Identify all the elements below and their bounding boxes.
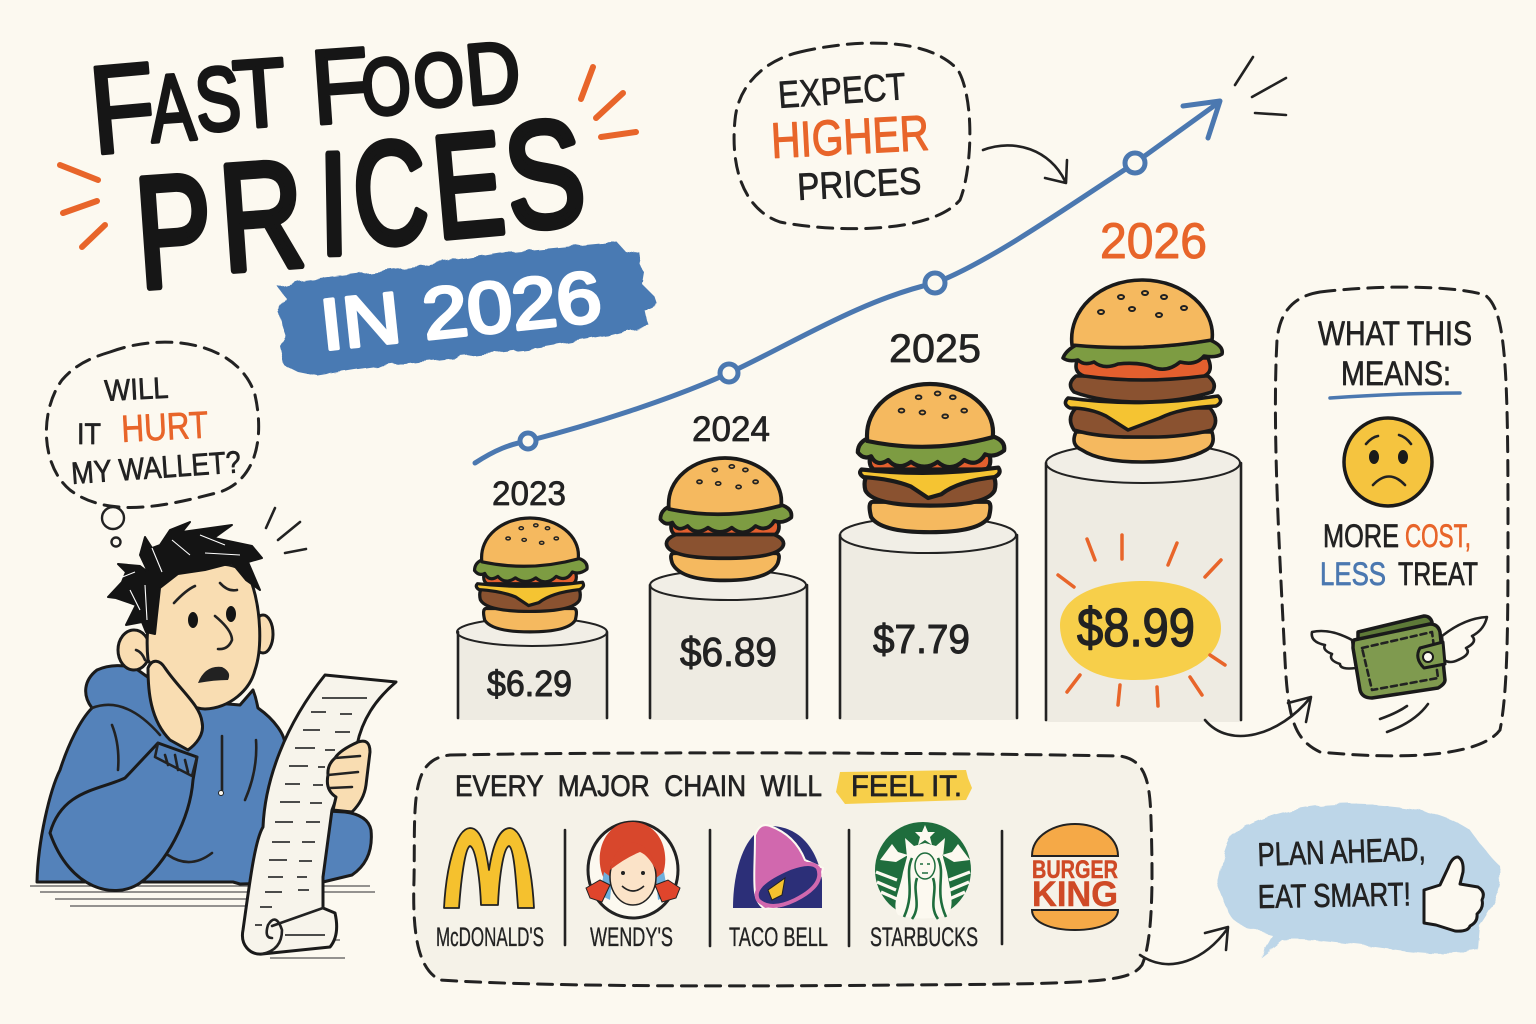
callout: expect higher prices: EXPECT <box>777 66 907 117</box>
price 6.29: $6.29 <box>487 663 572 704</box>
illustration: worried person <box>30 508 396 958</box>
brush banner <box>278 242 658 376</box>
callout: expect higher prices <box>734 43 970 229</box>
spark marks <box>1235 57 1286 115</box>
label: 2024: 2024 <box>692 410 770 449</box>
title: food: F <box>307 27 373 147</box>
pedestal 2025 <box>840 327 1017 720</box>
logo: burger king: BURGER <box>1032 856 1118 884</box>
text: plan ahead: PLAN AHEAD, <box>1257 830 1426 873</box>
logo: wendys <box>586 822 680 952</box>
thought bubble <box>46 342 259 546</box>
price rays <box>1058 535 1225 706</box>
title: prices: E <box>427 102 510 269</box>
title: prices <box>130 87 592 322</box>
thought dots <box>102 507 124 546</box>
burger 2026 <box>1063 280 1222 462</box>
text: my wallet: MY WALLET? <box>70 444 242 491</box>
title: food: D <box>461 24 524 124</box>
title: prices: C <box>347 109 434 277</box>
hair <box>108 522 262 634</box>
logo: starbucks <box>870 822 978 952</box>
text: hurt: HURT <box>120 404 209 451</box>
text: it: IT <box>77 418 101 451</box>
callout: expect higher prices: PRICES <box>796 161 922 209</box>
title: in 2026: IN 2026 <box>316 257 605 366</box>
text: will: WILL <box>104 372 169 408</box>
title: fast <box>84 36 290 181</box>
trend line <box>475 101 1220 463</box>
text: more: MORE <box>1323 518 1399 554</box>
burger 2025 <box>858 384 1004 532</box>
logo: burger king <box>1032 824 1118 930</box>
pedestal 2023 <box>457 475 607 720</box>
cuff and forearm <box>50 743 197 890</box>
burger 2024 <box>660 458 791 580</box>
text: eat smart: EAT SMART! <box>1257 875 1411 915</box>
price 7.79: $7.79 <box>873 616 970 662</box>
callout: expect higher prices: HIGHER <box>770 105 930 169</box>
logo: taco bell: TACO BELL <box>729 922 828 952</box>
icon: thumbs up <box>1424 857 1483 931</box>
orange accent marks <box>60 67 636 247</box>
icon: sad face <box>1344 418 1432 506</box>
logo: burger king: KING <box>1032 875 1118 914</box>
price highlight blob <box>1060 581 1221 680</box>
icon: flying wallet <box>1312 616 1487 732</box>
logo: taco bell <box>729 825 828 952</box>
text: cost: COST, <box>1405 518 1471 554</box>
receipt <box>242 675 396 954</box>
heading: WHAT THIS <box>1318 315 1472 353</box>
dividers <box>565 830 1002 946</box>
table hatching <box>30 886 375 958</box>
logo: starbucks: STARBUCKS <box>870 922 978 952</box>
text: treat: TREAT <box>1398 556 1478 592</box>
title: fast: F <box>84 36 161 181</box>
face <box>147 564 260 709</box>
arrow: callout to trend <box>983 145 1067 183</box>
highlight <box>836 770 972 804</box>
label: 2023: 2023 <box>492 475 566 513</box>
arrow: chains to plan ahead <box>1140 927 1228 964</box>
panel: what this means <box>1275 287 1508 756</box>
ear right <box>253 615 273 653</box>
arrow: price to meaning panel <box>1205 697 1311 736</box>
face details <box>136 583 237 683</box>
hoodie <box>37 666 371 884</box>
raised hand <box>148 661 203 750</box>
price 6.89: $6.89 <box>680 629 777 675</box>
price 8.99: $8.99 <box>1077 598 1195 658</box>
receipt hand <box>327 741 370 812</box>
title: fast: A <box>146 54 198 163</box>
title: food: O <box>410 36 467 124</box>
pedestal 2024 <box>650 410 807 720</box>
title: food: O <box>358 41 415 134</box>
title <box>60 24 658 376</box>
bubble: plan ahead <box>1217 804 1500 957</box>
title: prices: R <box>214 128 309 304</box>
worry marks <box>266 508 306 553</box>
text: less: LESS <box>1320 556 1386 592</box>
label: 2026: 2026 <box>1100 213 1207 269</box>
title: prices: I <box>318 123 350 285</box>
heading line 2: MEANS: <box>1341 355 1451 393</box>
burger 2023 <box>475 518 587 632</box>
pedestal 2026 <box>1046 213 1241 722</box>
label: 2025: 2025 <box>889 327 981 371</box>
logo: wendys: WENDY'S <box>590 922 673 952</box>
logo: mcdonalds: McDONALD'S <box>436 922 544 952</box>
title: food <box>307 24 524 147</box>
blue underline <box>1330 393 1460 398</box>
title: fast: S <box>191 47 245 151</box>
title: fast: T <box>230 39 290 149</box>
heading: EVERY MAJOR CHAIN WILL <box>455 770 822 803</box>
ear left <box>118 630 150 670</box>
title: prices: S <box>497 87 592 262</box>
heading highlight text: FEEL IT. <box>851 770 962 803</box>
title: prices: P <box>130 141 218 322</box>
logo: mcdonalds <box>436 828 544 952</box>
panel: every major chain <box>414 753 1152 986</box>
